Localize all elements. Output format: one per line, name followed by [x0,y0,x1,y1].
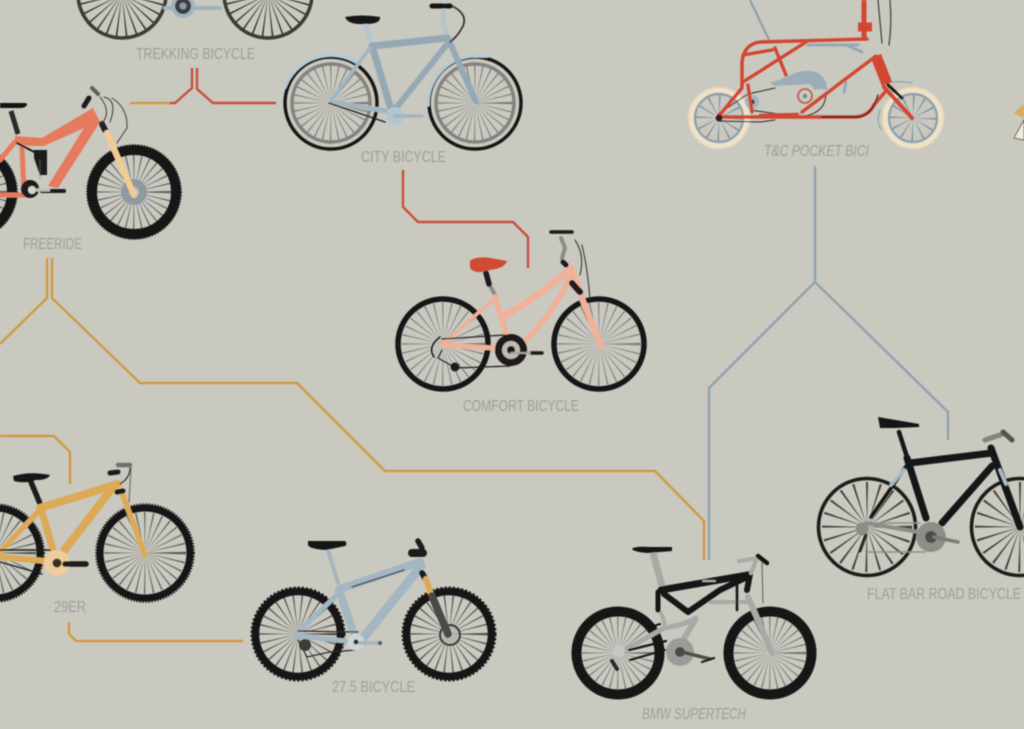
bike: 27.5 bicycle [252,541,496,680]
connector: freeride to left branch [0,258,47,344]
city front wheel [428,56,521,149]
label: 29er: 29ER [54,599,86,616]
comfort saddle and handlebar [470,232,572,272]
29er rear wheel [0,504,44,602]
freeride saddle and bars [0,88,127,143]
label: comfort bicycle: COMFORT BICYCLE [463,398,579,415]
bike: BMW supertech [576,547,812,694]
trekking front wheel [224,0,312,38]
label: freeride: FREERIDE [23,236,82,253]
bike: freeride [0,88,181,239]
BMW rear wheel [576,612,660,694]
freeride rear wheel [0,145,17,239]
connector: into T&C pocket [750,0,769,40]
29er saddle and handlebar [13,465,131,502]
29er frame [0,482,145,576]
bike: flat bar road bicycle [818,417,1024,576]
connector: 29er to 27.5 [69,622,243,641]
29er front wheel [96,504,194,602]
27.5 front wheel [402,588,496,680]
flat bar frame [856,432,1020,552]
BMW frame [612,553,772,669]
comfort rear wheel [398,299,488,389]
27.5 rear wheel [252,588,344,680]
flat bar saddle and handlebar [878,417,1012,440]
connector: trekking to city, red [197,68,276,103]
trekking rear wheel [78,0,166,38]
bike: trekking bicycle [78,0,312,38]
connector: city to comfort [403,170,528,268]
connector: trekking to freeride, red [170,68,192,103]
connector: freeride to BMW supertech [52,258,704,560]
bike: T&C pocket bici [688,0,944,148]
label: trekking bicycle: TREKKING BICYCLE [136,46,255,63]
connector: T&C pocket to BMW and flat bar [709,166,948,560]
next bike fragment at right edge [1014,104,1024,140]
city saddle and handlebar [345,6,450,24]
label: 27.5 bicycle: 27.5 BICYCLE [332,679,415,696]
bike: comfort bicycle [398,232,644,389]
freeride frame [0,108,134,198]
27.5 saddle and handlebar [308,541,423,553]
trekking frame and chainring [165,0,220,18]
label: T&C pocket bici: T&C POCKET BICI [764,143,870,160]
comfort frame [432,240,601,372]
comfort front wheel [554,299,644,389]
pocket front wheel [882,88,944,148]
freeride front wheel [87,145,181,239]
bike: 29er [0,465,194,602]
city rear wheel [285,55,377,149]
27.5 frame [296,550,448,657]
BMW saddle and handlebar [632,547,767,603]
label: BMW supertech: BMW SUPERTECH [642,706,747,723]
BMW front wheel [728,612,812,694]
flat bar front wheel [972,478,1024,576]
city frame [329,5,476,125]
flat bar rear wheel [818,478,916,576]
bike: city bicycle [285,5,521,149]
label: city bicycle: CITY BICYCLE [361,149,446,166]
connector: freeride to city, orange segment [130,102,171,104]
pocket chain guard and gears [718,45,912,129]
pocket rear wheel [688,88,750,148]
pocket red frame [716,0,912,121]
connector: into 29er [0,436,70,484]
